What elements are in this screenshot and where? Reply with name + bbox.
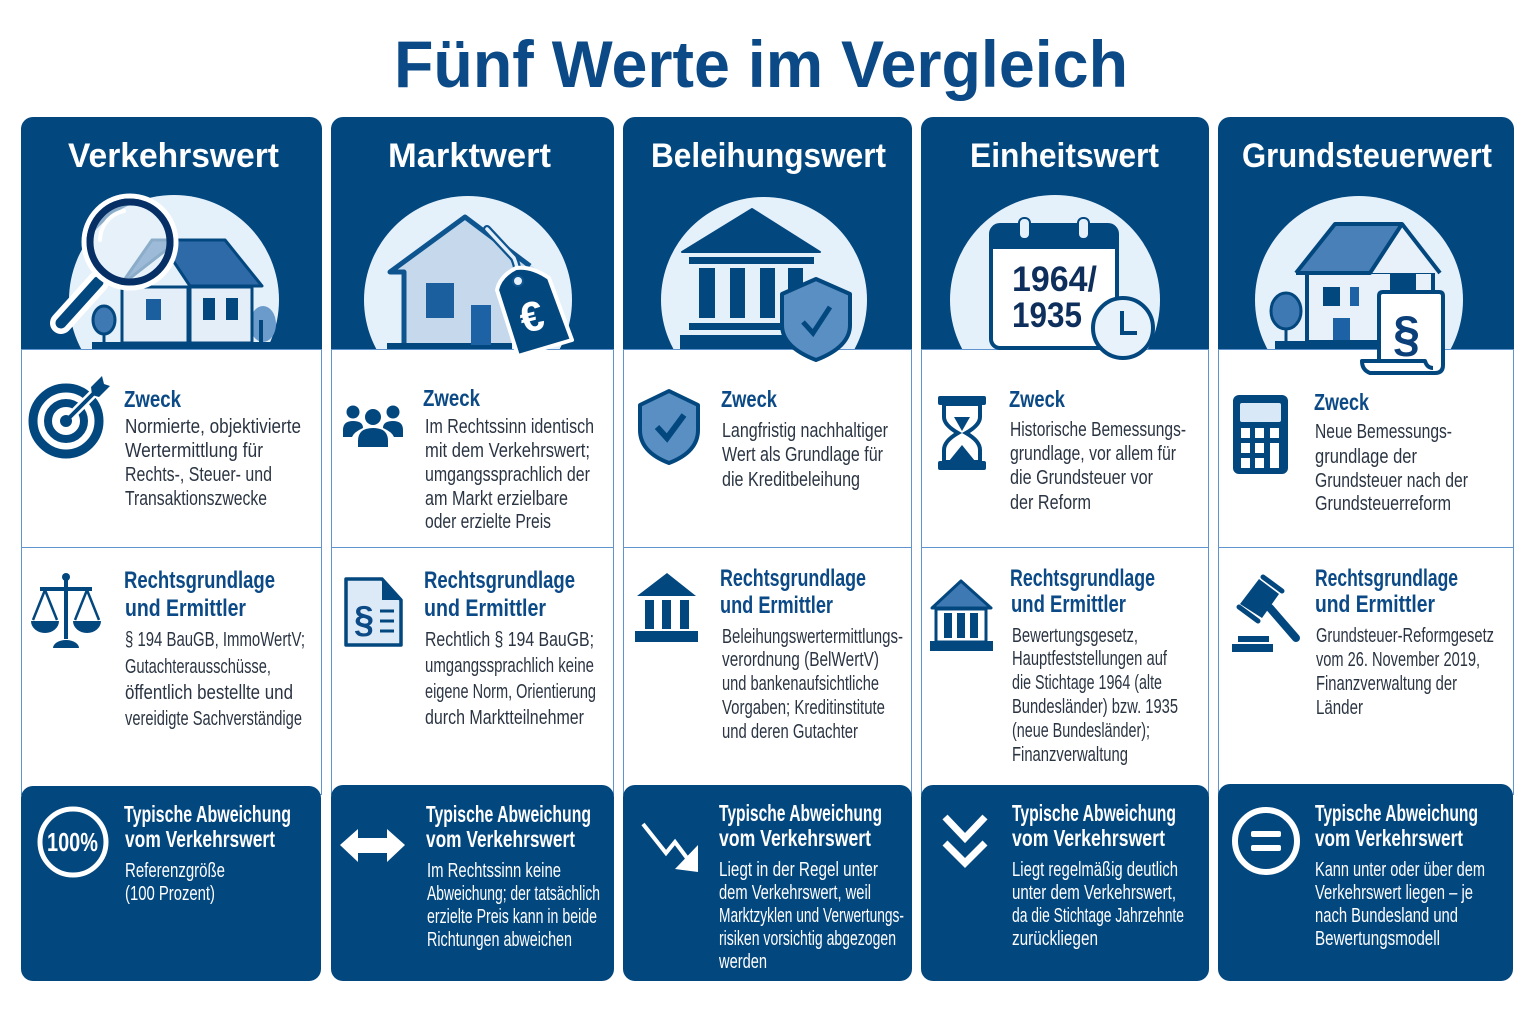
icon: small bank: [635, 573, 698, 642]
text: Zweck: [721, 386, 888, 491]
text: Rechtsgrundlage: Finanzverwaltung: [1012, 744, 1128, 766]
text: Abweichung: [1315, 800, 1485, 950]
text: Rechtsgrundlage: Rechtsgrundlage: [1315, 565, 1458, 592]
text: Rechtsgrundlage: Rechtsgrundlage: [1010, 565, 1155, 592]
text: Abweichung: Liegt in der Regel unter: [719, 859, 878, 881]
text: Abweichung: Typische Abweichung: [124, 801, 291, 827]
icon: calendar: 1935: [1012, 296, 1082, 335]
text: Zweck: oder erzielte Preis: [425, 511, 551, 533]
text: Zweck: grundlage, vor allem für: [1010, 443, 1176, 465]
text: Zweck: mit dem Verkehrswert;: [425, 440, 590, 462]
text: Abweichung: Bewertungsmodell: [1315, 928, 1440, 950]
icon: paragraph document: §: [354, 599, 374, 641]
text: Abweichung: Abweichung; der tatsächlich: [427, 883, 600, 905]
heading: Marktwert: Marktwert: [388, 137, 551, 175]
text: Rechtsgrundlage: und Ermittler: [1011, 591, 1126, 618]
text: Rechtsgrundlage: Rechtsgrundlage: [720, 565, 866, 592]
text: Abweichung: vom Verkehrswert: [426, 826, 575, 852]
text: Zweck: Transaktionszwecke: [125, 488, 267, 510]
text: Rechtsgrundlage: Bewertungsgesetz,: [1012, 625, 1138, 647]
icon: bank building: [680, 209, 820, 349]
text: Zweck: [124, 386, 301, 510]
text: Abweichung: dem Verkehrswert, weil: [719, 882, 871, 904]
icon: 100 percent: 100%: [47, 827, 98, 857]
text: Abweichung: Richtungen abweichen: [427, 929, 572, 951]
text: Zweck: Grundsteuer nach der: [1315, 470, 1468, 492]
text: Zweck: Zweck: [1009, 386, 1065, 412]
text: Rechtsgrundlage: [720, 565, 903, 743]
text: Rechtsgrundlage: eigene Norm, Orientierung: [425, 681, 596, 703]
icon: paragraph scroll: §: [1393, 306, 1420, 362]
text: Rechtsgrundlage: und Ermittler: [424, 595, 546, 622]
heading: Beleihungswert: Beleihungswert: [651, 137, 886, 175]
icon: house: [387, 217, 540, 349]
text: Zweck: Grundsteuerreform: [1315, 493, 1451, 515]
text: Zweck: die Kreditbeleihung: [722, 469, 860, 491]
text: Rechtsgrundlage: [124, 567, 305, 730]
panel: Marktwert: [331, 117, 614, 981]
text: Abweichung: da die Stichtage Jahrzehnte: [1012, 905, 1184, 927]
text: Zweck: Rechts-, Steuer- und: [125, 464, 272, 486]
text: Zweck: umgangssprachlich der: [425, 464, 590, 486]
text: Abweichung: vom Verkehrswert: [125, 826, 275, 852]
text: Rechtsgrundlage: öffentlich bestellte und: [125, 682, 293, 704]
text: Abweichung: [124, 801, 291, 905]
icon: check mark: [803, 307, 830, 333]
text: Zweck: am Markt erzielbare: [425, 488, 568, 510]
text: Abweichung: erzielte Preis kann in beide: [427, 906, 597, 928]
text: Abweichung: Liegt regelmäßig deutlich: [1012, 859, 1178, 881]
panel: Grundsteuerwert: [1218, 117, 1514, 981]
text: Abweichung: vom Verkehrswert: [719, 825, 871, 851]
text: Abweichung: nach Bundesland und: [1315, 905, 1458, 927]
text: Abweichung: Im Rechtssinn keine: [427, 860, 561, 882]
text: Rechtsgrundlage: die Stichtage 1964 (alte: [1012, 672, 1162, 694]
icon: price tag: €: [515, 291, 549, 342]
icon: paragraph scroll: [1362, 292, 1443, 373]
text: Rechtsgrundlage: und deren Gutachter: [722, 721, 858, 743]
text: Rechtsgrundlage: Bundesländer) bzw. 1935: [1012, 696, 1178, 718]
text: Rechtsgrundlage: (neue Bundesländer);: [1012, 720, 1150, 742]
icon: clock: [1093, 298, 1153, 358]
icon: calendar: 1964/: [1012, 260, 1097, 299]
icon: house under magnifier: [92, 240, 279, 349]
text: Zweck: [423, 385, 594, 533]
text: Zweck: grundlage der: [1315, 446, 1417, 468]
text: Rechtsgrundlage: Rechtsgrundlage: [124, 567, 275, 594]
text: Rechtsgrundlage: [1010, 565, 1178, 766]
text: Rechtsgrundlage: Vorgaben; Kreditinstitute: [722, 697, 885, 719]
text: Rechtsgrundlage: Beleihungswertermittlungs-: [722, 626, 903, 648]
text: Abweichung: vom Verkehrswert: [1315, 825, 1463, 851]
text: Rechtsgrundlage: § 194 BauGB, ImmoWertV;: [125, 629, 305, 651]
text: Zweck: Im Rechtssinn identisch: [425, 416, 594, 438]
heading: Grundsteuerwert: Grundsteuerwert: [1242, 137, 1492, 175]
text: Abweichung: Verkehrswert liegen – je: [1315, 882, 1473, 904]
panel: Beleihungswert: [623, 117, 912, 981]
text: Zweck: Zweck: [721, 386, 777, 412]
text: Abweichung: risiken vorsichtig abgezogen: [719, 928, 896, 950]
text: Zweck: Normierte, objektivierte: [125, 416, 301, 438]
icon: hourglass: [938, 396, 986, 470]
text: Rechtsgrundlage: durch Marktteilnehmer: [425, 707, 584, 729]
icon: arrow head: [675, 845, 698, 872]
text: Abweichung: (100 Prozent): [125, 883, 215, 905]
text: Zweck: die Grundsteuer vor: [1010, 467, 1153, 489]
text: Abweichung: [1012, 800, 1184, 950]
text: Abweichung: werden: [718, 951, 767, 973]
text: Rechtsgrundlage: [424, 567, 596, 729]
text: Rechtsgrundlage: Rechtsgrundlage: [424, 567, 575, 594]
text: Zweck: Wertermittlung für: [125, 440, 263, 462]
text: Zweck: [1009, 386, 1186, 514]
text: Rechtsgrundlage: und Ermittler: [1315, 591, 1435, 618]
text: Rechtsgrundlage: [1315, 565, 1494, 719]
text: Abweichung: Typische Abweichung: [426, 801, 591, 827]
icon: gavel: [1232, 577, 1296, 652]
panel: Einheitswert: [921, 117, 1209, 981]
text: Zweck: Historische Bemessungs-: [1010, 419, 1186, 441]
icon: scales: [31, 573, 101, 648]
text: Rechtsgrundlage: umgangssprachlich keine: [425, 655, 594, 677]
text: Abweichung: Referenzgröße: [125, 860, 225, 882]
icon: paragraph document: [346, 579, 401, 645]
text: Zweck: [1314, 389, 1468, 515]
text: Zweck: Wert als Grundlage für: [722, 444, 883, 466]
icon: double arrow: [340, 829, 405, 862]
text: Rechtsgrundlage: und Ermittler: [720, 592, 833, 619]
text: Rechtsgrundlage: vereidigte Sachverständige: [125, 708, 302, 730]
text: Abweichung: [426, 801, 600, 951]
text: Rechtsgrundlage: Gutachterausschüsse,: [125, 656, 271, 678]
text: Zweck: Zweck: [423, 385, 480, 411]
icon: calculator: [1233, 395, 1288, 474]
text: Abweichung: [718, 800, 904, 973]
title: Fünf Werte im Vergleich: [394, 27, 1128, 101]
text: Abweichung: Marktzyklen und Verwertungs-: [719, 905, 904, 927]
icon: small shield: [640, 391, 698, 463]
panel: Verkehrswert: [21, 117, 322, 981]
heading: Verkehrswert: Verkehrswert: [68, 137, 279, 175]
icon: double chevron: [945, 817, 985, 863]
icon: people: [343, 406, 403, 447]
icon: house with tree: [1271, 224, 1440, 349]
text: Rechtsgrundlage: Länder: [1316, 697, 1363, 719]
icon: large shield: [782, 279, 850, 360]
text: Zweck: der Reform: [1010, 492, 1091, 514]
text: Abweichung: zurückliegen: [1012, 928, 1098, 950]
heading: Einheitswert: Einheitswert: [970, 137, 1159, 175]
icon: falling arrow: [643, 824, 690, 862]
text: Rechtsgrundlage: vom 26. November 2019,: [1316, 649, 1480, 671]
text: Rechtsgrundlage: Hauptfeststellungen auf: [1012, 648, 1167, 670]
icon: target: [33, 376, 110, 454]
icon: bank with roof: [930, 581, 993, 651]
text: Rechtsgrundlage: verordnung (BelWertV): [722, 649, 879, 671]
icon: price tag: [487, 229, 572, 356]
text: Abweichung: vom Verkehrswert: [1012, 825, 1165, 851]
icon: calendar: [991, 218, 1117, 348]
text: Zweck: Langfristig nachhaltiger: [722, 420, 888, 442]
text: Zweck: Zweck: [124, 386, 181, 412]
icon: magnifier: [61, 196, 176, 323]
text: Rechtsgrundlage: und bankenaufsichtliche: [722, 673, 879, 695]
text: Abweichung: unter dem Verkehrswert,: [1012, 882, 1176, 904]
text: Abweichung: Typische Abweichung: [719, 800, 882, 826]
text: Rechtsgrundlage: Finanzverwaltung der: [1316, 673, 1457, 695]
icon: equal sign: [1235, 810, 1297, 872]
text: Rechtsgrundlage: Rechtlich § 194 BauGB;: [425, 629, 594, 651]
text: Rechtsgrundlage: und Ermittler: [125, 595, 246, 622]
text: Abweichung: Typische Abweichung: [1012, 800, 1176, 826]
text: Zweck: Zweck: [1314, 389, 1369, 415]
text: Zweck: Neue Bemessungs-: [1315, 421, 1452, 443]
icon: 100 percent: [40, 809, 106, 875]
